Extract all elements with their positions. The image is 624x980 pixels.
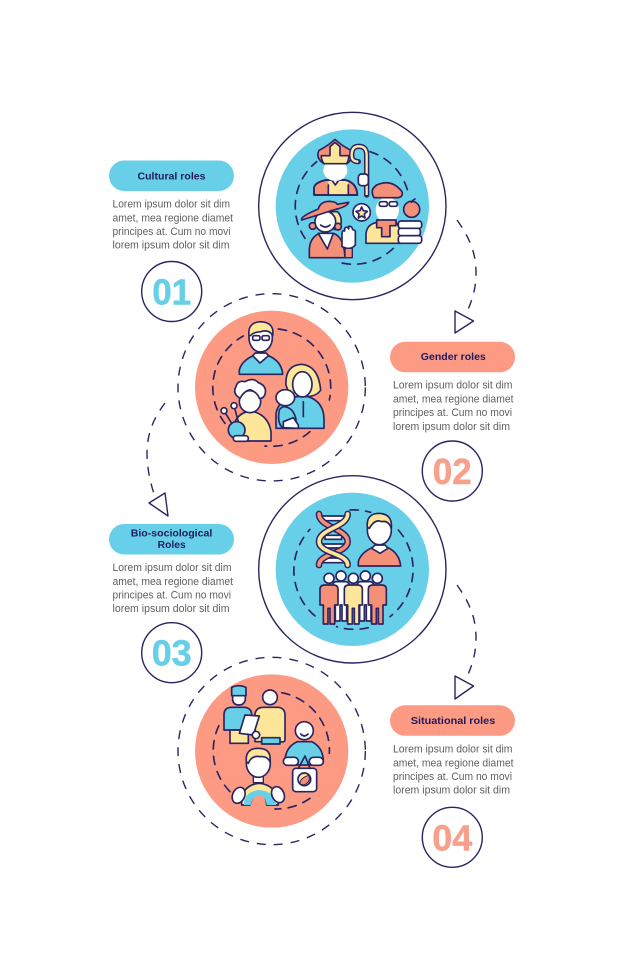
icon: group of five people bbox=[320, 571, 386, 624]
body text: gender roles: amet, mea regione diamet bbox=[393, 394, 514, 406]
arrow: gender to bio-sociological bbox=[147, 403, 168, 516]
pill heading: bio-sociological roles: Roles bbox=[158, 540, 186, 551]
arrow: bio-sociological to situational bbox=[455, 585, 476, 699]
icon: shopper with bag bbox=[283, 722, 323, 792]
body text: gender roles: Lorem ipsum dolor sit dim bbox=[393, 380, 513, 392]
icon: man portrait bbox=[358, 513, 401, 566]
icon: DNA helix bbox=[319, 514, 348, 565]
panel: situational roles text bbox=[390, 705, 515, 867]
body text: gender roles: lorem ipsum dolor sit dim bbox=[393, 421, 510, 433]
body text: bio-sociological roles: amet, mea regione diamet bbox=[112, 576, 233, 588]
number badge 04 bbox=[422, 807, 482, 867]
pill heading: bio-sociological roles: Bio-sociological bbox=[131, 528, 212, 540]
body text: situational roles: amet, mea regione diamet bbox=[393, 758, 514, 770]
icon: mother with baby bbox=[276, 364, 324, 428]
pill heading: gender roles bbox=[390, 342, 515, 372]
body text: bio-sociological roles: principes at. Cum no movi bbox=[112, 590, 231, 602]
icon: star badge bbox=[353, 204, 370, 221]
icon: grandmother knitting bbox=[221, 380, 271, 441]
circle: gender roles illustration bbox=[178, 294, 365, 481]
circle: situational roles illustration bbox=[178, 657, 365, 845]
panel: bio-sociological roles text bbox=[109, 524, 234, 683]
body text: cultural roles: amet, mea regione diamet bbox=[112, 212, 233, 224]
body text: situational roles: lorem ipsum dolor sit dim bbox=[393, 784, 510, 796]
pill heading: bio-sociological roles bbox=[109, 524, 234, 554]
panel: gender roles text bbox=[390, 342, 515, 501]
circle: cultural roles illustration bbox=[259, 112, 446, 300]
icon: doctor with clipboard bbox=[224, 686, 260, 743]
number badge 02 bbox=[422, 441, 482, 501]
number badge 03 bbox=[142, 623, 202, 683]
pill heading: situational roles: Situational roles bbox=[411, 716, 496, 727]
icon: patient bbox=[255, 690, 285, 744]
number badge 03: 03 bbox=[152, 633, 192, 674]
body text: gender roles: principes at. Cum no movi bbox=[393, 407, 512, 419]
body text: situational roles: Lorem ipsum dolor sit dim bbox=[393, 744, 513, 756]
icon: man with glasses bbox=[239, 322, 283, 374]
icon: artist with books and apple bbox=[366, 183, 422, 243]
icon: bishop bbox=[314, 139, 368, 195]
icon: woman with hat raising hand bbox=[302, 201, 355, 258]
body text: cultural roles: principes at. Cum no movi bbox=[112, 226, 230, 238]
body text: bio-sociological roles: Lorem ipsum dolor sit dim bbox=[112, 562, 232, 574]
number badge 01: 01 bbox=[152, 272, 191, 312]
arrow: cultural to gender bbox=[455, 220, 476, 333]
icon: driver at steering wheel bbox=[230, 748, 287, 805]
pill heading: cultural roles bbox=[109, 160, 234, 191]
panel: cultural roles text bbox=[109, 160, 234, 322]
pill heading: gender roles: Gender roles bbox=[421, 352, 486, 363]
circle: bio-sociological roles illustration bbox=[259, 476, 446, 663]
body text: cultural roles: lorem ipsum dolor sit dim bbox=[112, 240, 230, 252]
number badge 02: 02 bbox=[433, 451, 472, 492]
body text: bio-sociological roles: lorem ipsum dolor sit dim bbox=[112, 603, 230, 615]
number badge 01 bbox=[142, 262, 202, 322]
body text: cultural roles: Lorem ipsum dolor sit dim bbox=[112, 198, 230, 210]
pill heading: situational roles bbox=[390, 705, 515, 736]
number badge 04: 04 bbox=[432, 817, 472, 858]
pill heading: cultural roles: Cultural roles bbox=[138, 172, 206, 182]
body text: situational roles: principes at. Cum no movi bbox=[393, 771, 512, 783]
